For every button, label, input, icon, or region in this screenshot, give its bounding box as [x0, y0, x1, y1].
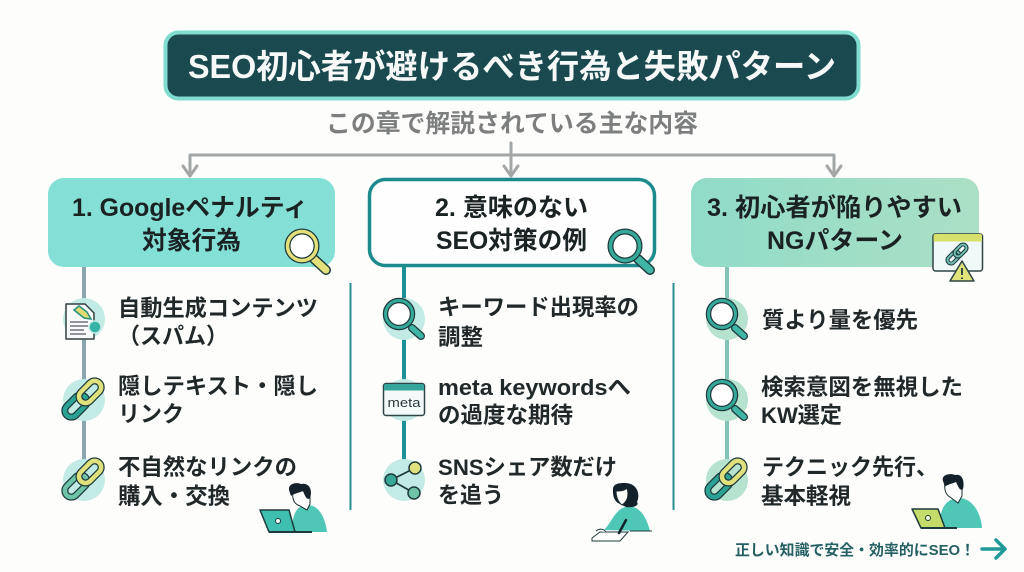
item text: unnatural links: 不自然なリンクの [118, 454, 297, 480]
panel: column 2 meaningless SEO [370, 180, 654, 541]
column 1 heading text [72, 194, 308, 255]
column 1 heading text: 対象行為 [142, 227, 241, 255]
icon: link chain [62, 378, 105, 421]
column 3 heading text: 3. 初心者が陥りやすい [707, 193, 962, 222]
column 3 timeline [725, 267, 729, 465]
panel: column 3 NG patterns [691, 178, 982, 528]
icon: window with broken link warning [933, 234, 982, 281]
subtitle: この章で解説されている主な内容 [326, 110, 698, 138]
arrows: connector to three sections [183, 143, 841, 176]
divider lines [350, 283, 674, 510]
item text: unnatural links: 購入・交換 [118, 484, 230, 509]
column 2 timeline [402, 267, 406, 465]
icon: person with yellow laptop [912, 474, 982, 528]
item text: technique first: 基本軽視 [761, 484, 851, 509]
title [166, 32, 858, 98]
item text: SNS shares: SNSシェア数だけ [438, 455, 617, 480]
callout: closing message with arrow: 正しい知識で安全・効率的にSEO！ [735, 541, 975, 559]
item text: technique first: テクニック先行、 [762, 455, 938, 480]
icon: share nodes [383, 459, 425, 501]
column 3 heading box [691, 178, 979, 267]
item text: hidden text and links: 隠しテキスト・隠し [118, 374, 318, 399]
icon: link chain [705, 458, 748, 501]
item text: meta keywords: の過度な期待 [438, 403, 573, 428]
item text: unnatural links [118, 454, 297, 509]
item text: auto-generated content: 自動生成コンテンツ [118, 296, 318, 321]
icon: magnifier quality [706, 298, 748, 340]
item text: keyword density: キーワード出現率の [438, 295, 639, 320]
title: SEO初心者が避けるべき行為と失敗パターン [188, 48, 836, 85]
column 1 heading box [48, 178, 335, 267]
item text: keyword density: 調整 [438, 325, 483, 350]
item text: auto-generated content [118, 296, 318, 349]
column 2 heading box [370, 180, 654, 266]
item text: SNS shares: を追う [438, 483, 504, 508]
icon: person writing [592, 483, 652, 541]
column 3 heading text: NGパターン [767, 227, 903, 255]
column 1 heading text: 1. Googleペナルティ [72, 194, 308, 222]
icon: meta window: meta [388, 395, 421, 410]
column 2 heading text: 2. 意味のない [435, 194, 588, 222]
column 1 timeline [82, 267, 86, 465]
icon: magnifier [383, 298, 425, 340]
icon: automated content document [63, 298, 105, 340]
item text: hidden text and links: リンク [118, 402, 184, 427]
item text: ignoring search intent: 検索意図を無視した [761, 375, 963, 400]
item text: auto-generated content: （スパム） [118, 324, 228, 349]
icon: link chain light [62, 458, 105, 501]
item text: ignoring search intent: KW選定 [761, 403, 842, 428]
item text: meta keywords: meta keywordsへ [438, 375, 631, 400]
item text: quantity over quality: 質より量を優先 [762, 308, 918, 333]
arrow [982, 540, 1005, 558]
column 2 heading text [435, 194, 588, 255]
column 3 heading text [707, 193, 962, 255]
item text: hidden text and links [118, 374, 318, 427]
item text: technique first [761, 455, 938, 509]
icon: person with laptop [260, 483, 327, 532]
icon: meta window [383, 379, 425, 421]
item text: keyword density [438, 295, 639, 350]
item text: SNS shares [438, 455, 617, 508]
icon: yellow magnifier [288, 232, 326, 270]
column 2 heading text: SEO対策の例 [436, 227, 587, 255]
panel: column 1 Google penalty [48, 178, 335, 532]
item text: ignoring search intent [761, 375, 963, 428]
item text: meta keywords [438, 375, 631, 428]
icon: magnifier intent [706, 379, 748, 421]
icon: teal magnifier [610, 232, 650, 270]
